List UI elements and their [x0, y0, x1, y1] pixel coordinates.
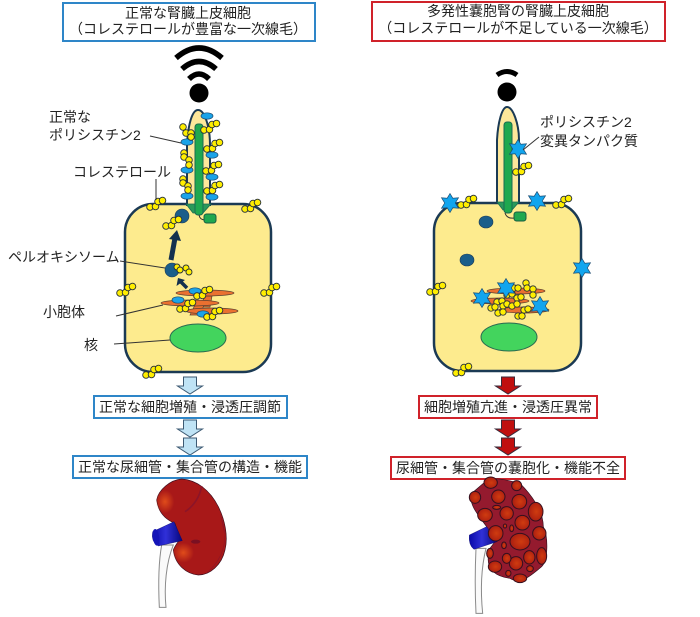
title box: normal renal epithelial cell — [63, 3, 315, 41]
endoplasmic reticulum — [161, 290, 238, 315]
box: abnormal proliferation — [419, 396, 597, 418]
label: polycystin-2: 正常な — [49, 109, 91, 125]
membrane cholesterol — [427, 162, 572, 376]
cholesterol near peroxisomes — [163, 216, 192, 275]
nucleus — [481, 323, 537, 351]
box: normal tubule structure: 正常な尿細管・集合管の構造・機能 — [78, 459, 302, 475]
label: polycystin-2: ポリシスチン2 — [49, 127, 141, 143]
label: mutant polycystin-2: ポリシスチン2 — [540, 114, 632, 130]
box: normal proliferation: 正常な細胞増殖・浸透圧調節 — [99, 399, 281, 415]
title box: polycystic kidney epithelial cell — [372, 2, 665, 41]
label: endoplasmic reticulum — [43, 304, 163, 320]
box: cystic tubules: 尿細管・集合管の嚢胞化・機能不全 — [396, 460, 620, 476]
polycystin-2 in ER — [172, 288, 209, 317]
label: nucleus: 核 — [84, 337, 98, 353]
title box: normal renal epithelial cell: （コレステロールが豊富な一次線毛） — [69, 21, 307, 37]
polycystin-2 on cilium — [181, 113, 218, 200]
peroxisomes — [460, 216, 493, 266]
label: peroxisome: ペルオキシソーム — [8, 249, 120, 265]
cholesterol in ER — [177, 286, 223, 320]
icon: strong signal — [176, 48, 222, 102]
primary cilium — [186, 110, 216, 223]
label: mutant polycystin-2 — [523, 114, 638, 150]
label: polycystin-2 — [49, 109, 181, 143]
panel: normal cell — [117, 110, 280, 378]
cholesterol in ER — [488, 280, 536, 319]
endoplasmic reticulum — [471, 288, 549, 313]
icon: weak signal — [497, 72, 517, 102]
label: cholesterol — [73, 164, 171, 200]
cell body — [125, 204, 271, 372]
cell body — [434, 203, 581, 371]
box: normal proliferation — [94, 396, 287, 418]
title box: polycystic kidney epithelial cell: （コレステロールが不足している一次線毛） — [378, 20, 658, 36]
mutant polycystin-2 stars — [442, 140, 590, 316]
peroxisomes — [165, 209, 189, 277]
primary cilium — [497, 107, 526, 221]
box: normal tubule structure — [73, 456, 307, 478]
arrows: disease flow — [496, 377, 520, 455]
membrane cholesterol — [117, 197, 280, 378]
cholesterol on cilium — [180, 120, 223, 194]
box: abnormal proliferation: 細胞増殖亢進・浸透圧異常 — [424, 399, 592, 415]
arrow: large transport — [169, 230, 181, 260]
label: cholesterol: コレステロール — [73, 164, 171, 180]
title box: normal renal epithelial cell: 正常な腎臓上皮細胞 — [125, 5, 251, 21]
arrow: small transport — [176, 278, 187, 288]
label: endoplasmic reticulum: 小胞体 — [43, 304, 85, 320]
icon: polycystic kidney — [469, 477, 547, 613]
box: cystic tubules — [391, 457, 625, 479]
icon: normal kidney — [152, 479, 226, 607]
label: mutant polycystin-2: 変異タンパク質 — [540, 133, 638, 149]
nucleus — [170, 324, 226, 352]
arrows: normal flow — [178, 377, 202, 455]
label: nucleus — [84, 337, 170, 353]
label: peroxisome — [8, 249, 165, 268]
panel: polycystic cell — [427, 107, 590, 376]
title box: polycystic kidney epithelial cell: 多発性嚢胞腎の腎臓上皮細胞 — [427, 3, 609, 19]
